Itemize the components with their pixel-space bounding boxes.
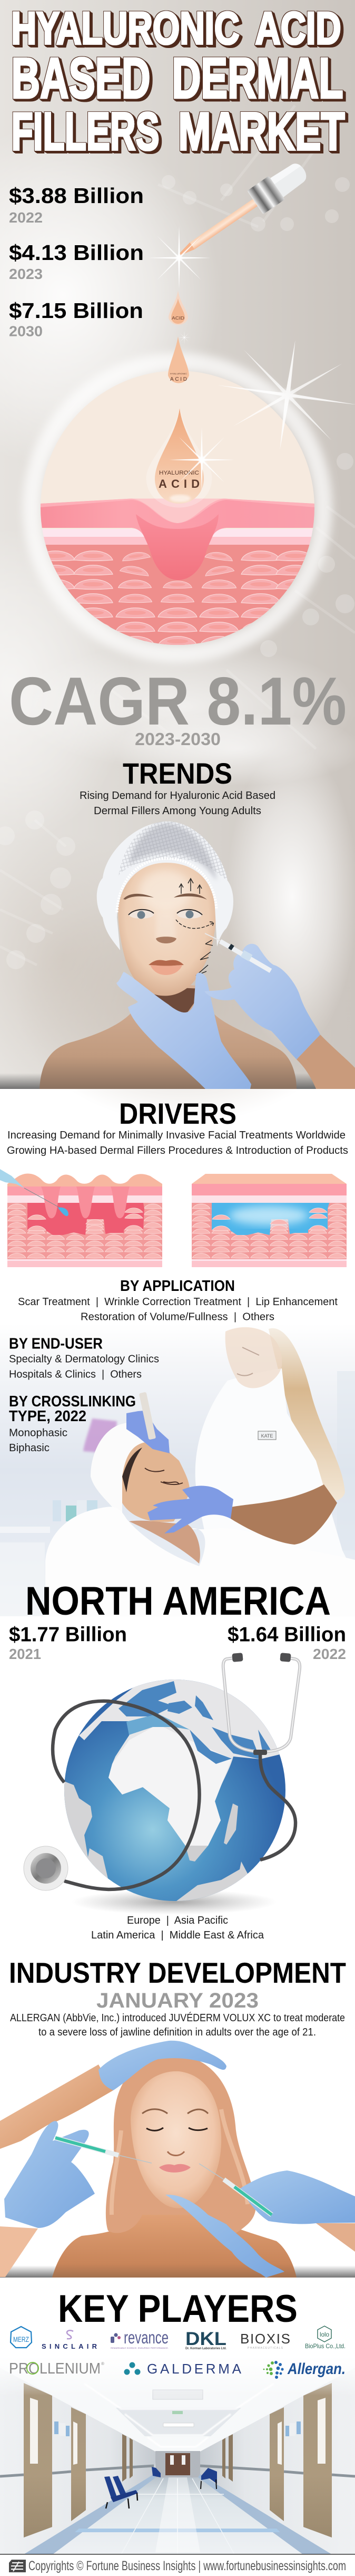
segment: by end-user: Specialty & Dermatology Clinics <box>9 1353 159 1365</box>
client towel <box>91 1423 158 1519</box>
icon: large hyaluronic acid droplet <box>146 408 212 507</box>
logo: bioxis: PHARMACEUTICALS <box>248 2347 283 2350</box>
illustration: skin before filler <box>0 1169 162 1267</box>
stat: 2023 value: 2023 <box>9 266 43 282</box>
handrails <box>0 2466 154 2476</box>
icon: droplet entering circle: HYALURONIC <box>170 372 187 375</box>
logo: bioplus: lolo <box>320 2331 329 2338</box>
logo: allergan <box>263 2360 346 2379</box>
drawn arrows <box>176 879 214 976</box>
cagr figure: 2023-2030 <box>135 729 221 749</box>
floor markings <box>75 2529 280 2532</box>
logo: dkl: DKL <box>185 2329 226 2349</box>
arms <box>0 2064 113 2149</box>
benches <box>104 2467 217 2509</box>
icon: droplet entering circle: ACID <box>170 377 187 382</box>
dermis <box>41 545 314 645</box>
stat: 2030 value <box>9 298 143 340</box>
icon: sparkles <box>169 330 355 493</box>
title: FILLERS <box>12 102 159 161</box>
logo: bioxis: BIOXIS <box>240 2331 290 2347</box>
illustration: skin after filler <box>192 1174 347 1267</box>
icon: large hyaluronic acid droplet: HYALURONIC <box>159 470 199 476</box>
segment: by application: BY APPLICATION <box>120 1278 235 1295</box>
icon: globe <box>64 1680 285 1901</box>
title: HYALURONIC <box>12 3 239 54</box>
eurasia and africa land <box>79 1680 279 1846</box>
madagascar <box>224 1803 238 1845</box>
back door <box>165 2453 190 2475</box>
stat: 2022 value: $3.88 Billion <box>9 184 144 208</box>
top fade into white <box>0 2356 355 2396</box>
logo: merz <box>11 2327 32 2348</box>
icon: globe shadow <box>72 1889 277 1915</box>
text: other regions: Europe | Asia Pacific <box>127 1915 228 1926</box>
logo: bioplus <box>305 2326 346 2350</box>
stat: north america 2021: 2021 <box>9 1646 41 1662</box>
text: development description: to a severe loss of jawline definition in adults over the age of 21. <box>38 2027 316 2038</box>
face <box>131 2071 221 2208</box>
light bands <box>41 529 314 537</box>
logo: bioplus: BioPlus Co.,Ltd. <box>305 2342 346 2350</box>
text: drivers description: Growing HA-based Dermal Fillers Procedures & Introduction of Products <box>7 1145 348 1156</box>
segment: by crosslinking type: BY CROSSLINKING <box>9 1393 136 1410</box>
stat: 2022 value <box>9 184 144 226</box>
segment: by end-user: BY END-USER <box>9 1335 103 1352</box>
segment: by end-user: Hospitals & Clinics | Others <box>9 1369 142 1381</box>
syringes <box>55 2138 272 2215</box>
heading: north america: NORTH AMERICA <box>25 1579 331 1624</box>
photo: woman with filler injections <box>0 2041 355 2278</box>
hair <box>106 2055 256 2236</box>
gloved hands <box>147 1486 233 1533</box>
nurse face <box>225 1327 282 1388</box>
text: drivers description <box>7 1130 348 1156</box>
segment: by application: Scar Treatment | Wrinkle Correction Treatment | Lip Enhancement <box>18 1296 338 1308</box>
logo: sinclair <box>42 2330 97 2350</box>
logo: revance: REMARKABLE SCIENCE. ENDURING PERFORMANCE. <box>111 2347 169 2349</box>
icon: stethoscope <box>24 1653 300 1890</box>
heading: drivers: DRIVERS <box>119 1097 236 1130</box>
syringe <box>0 1169 68 1216</box>
text: trends description: Dermal Fillers Among Young Adults <box>94 805 261 817</box>
white blue skirting <box>24 2474 156 2554</box>
text: other regions <box>91 1915 264 1941</box>
logo: galderma: GALDERMA <box>147 2361 242 2377</box>
icon: dropper <box>172 157 312 266</box>
text: drivers description: Increasing Demand for Minimally Invasive Facial Treatments Worldwide <box>7 1130 346 1141</box>
text: development description <box>10 2012 345 2038</box>
segment: by crosslinking type: Biphasic <box>9 1442 50 1454</box>
icon: small droplet: ACID <box>172 316 184 321</box>
photo: spa treatment <box>0 1324 355 1616</box>
stat: 2023 value: $4.13 Billion <box>9 240 144 265</box>
logo: prollenium: PROLLENIUM <box>9 2360 101 2377</box>
heading: trends: TRENDS <box>123 757 232 790</box>
shelves <box>0 1500 97 1616</box>
icon: small droplet <box>169 291 188 325</box>
stat: 2022 value: 2022 <box>9 209 43 226</box>
halo ring around skin circle <box>32 362 323 654</box>
segment: by end-user <box>9 1335 159 1381</box>
cap <box>97 822 233 950</box>
antarctic land <box>176 1861 248 1901</box>
segment: by application <box>18 1278 338 1323</box>
stat: north america 2022 <box>228 1623 346 1662</box>
epidermis <box>41 499 314 557</box>
logo: revance: revance <box>124 2328 169 2347</box>
decorative dna <box>0 175 354 969</box>
title: BASED <box>12 46 151 111</box>
top glove <box>98 2041 226 2090</box>
south america <box>64 1781 92 1867</box>
text: trends description <box>80 790 275 817</box>
ceiling trays <box>116 2408 241 2436</box>
footer logo <box>9 2560 26 2572</box>
robe <box>45 1507 355 1616</box>
blue land patches <box>119 1681 271 1764</box>
stat: north america 2021 <box>9 1623 127 1662</box>
doors right <box>303 2383 332 2538</box>
purple smudge <box>83 1419 117 1453</box>
title <box>12 3 344 161</box>
logo: revance <box>111 2328 169 2349</box>
icon: large hyaluronic acid droplet: ACID <box>159 477 200 490</box>
logo: prollenium: ® <box>101 2361 104 2366</box>
doors left <box>24 2383 52 2538</box>
gloves <box>297 1035 355 1089</box>
photo: hospital corridor <box>0 2356 355 2554</box>
wall signs <box>54 2421 301 2436</box>
nurse hair back <box>269 1328 345 1501</box>
logo: allergan: Allergan. <box>287 2360 346 2378</box>
panel: skin cross-section circle <box>36 371 315 647</box>
logo: dkl: Dr. Korman Laboratories Ltd. <box>185 2347 226 2350</box>
panel: hero background <box>0 0 355 1123</box>
lower left glove <box>4 2121 95 2228</box>
client face <box>122 1442 190 1522</box>
face features <box>123 894 154 900</box>
segment: by crosslinking type <box>9 1393 136 1454</box>
syringe <box>205 933 271 971</box>
lower right glove <box>240 2170 355 2224</box>
photo: woman receiving filler <box>40 822 355 1089</box>
stat: 2030 value: 2030 <box>9 323 43 340</box>
nurse uniform <box>195 1368 348 1561</box>
icon: sparkle at dropper tip <box>147 226 211 290</box>
icon: droplet entering circle <box>168 336 189 383</box>
stat: north america 2021: $1.77 Billion <box>9 1623 127 1646</box>
stat: north america 2022: 2022 <box>313 1646 346 1662</box>
heading: key players: KEY PLAYERS <box>58 2288 298 2330</box>
segment: by application: Restoration of Volume/Fullness | Others <box>81 1311 274 1323</box>
date: january 2023: JANUARY 2023 <box>96 1989 259 2012</box>
shoulders <box>52 2210 297 2278</box>
logo: merz: MERZ <box>13 2335 29 2343</box>
text: trends description: Rising Demand for Hyaluronic Acid Based <box>80 790 275 802</box>
segment: by crosslinking type: Monophasic <box>9 1427 67 1439</box>
segment: by crosslinking type: TYPE, 2022 <box>9 1408 86 1425</box>
photo: spa treatment: KATE <box>261 1433 273 1439</box>
stat: 2030 value: $7.15 Billion <box>9 298 143 323</box>
cells <box>36 551 315 647</box>
chin glove <box>165 2195 284 2278</box>
logo: sinclair: SINCLAIR <box>42 2342 97 2350</box>
stat: north america 2022: $1.64 Billion <box>228 1623 346 1646</box>
nurse arm <box>231 1484 337 1545</box>
stat: 2023 value <box>9 240 144 282</box>
text: other regions: Latin America | Middle East & Africa <box>91 1929 264 1941</box>
